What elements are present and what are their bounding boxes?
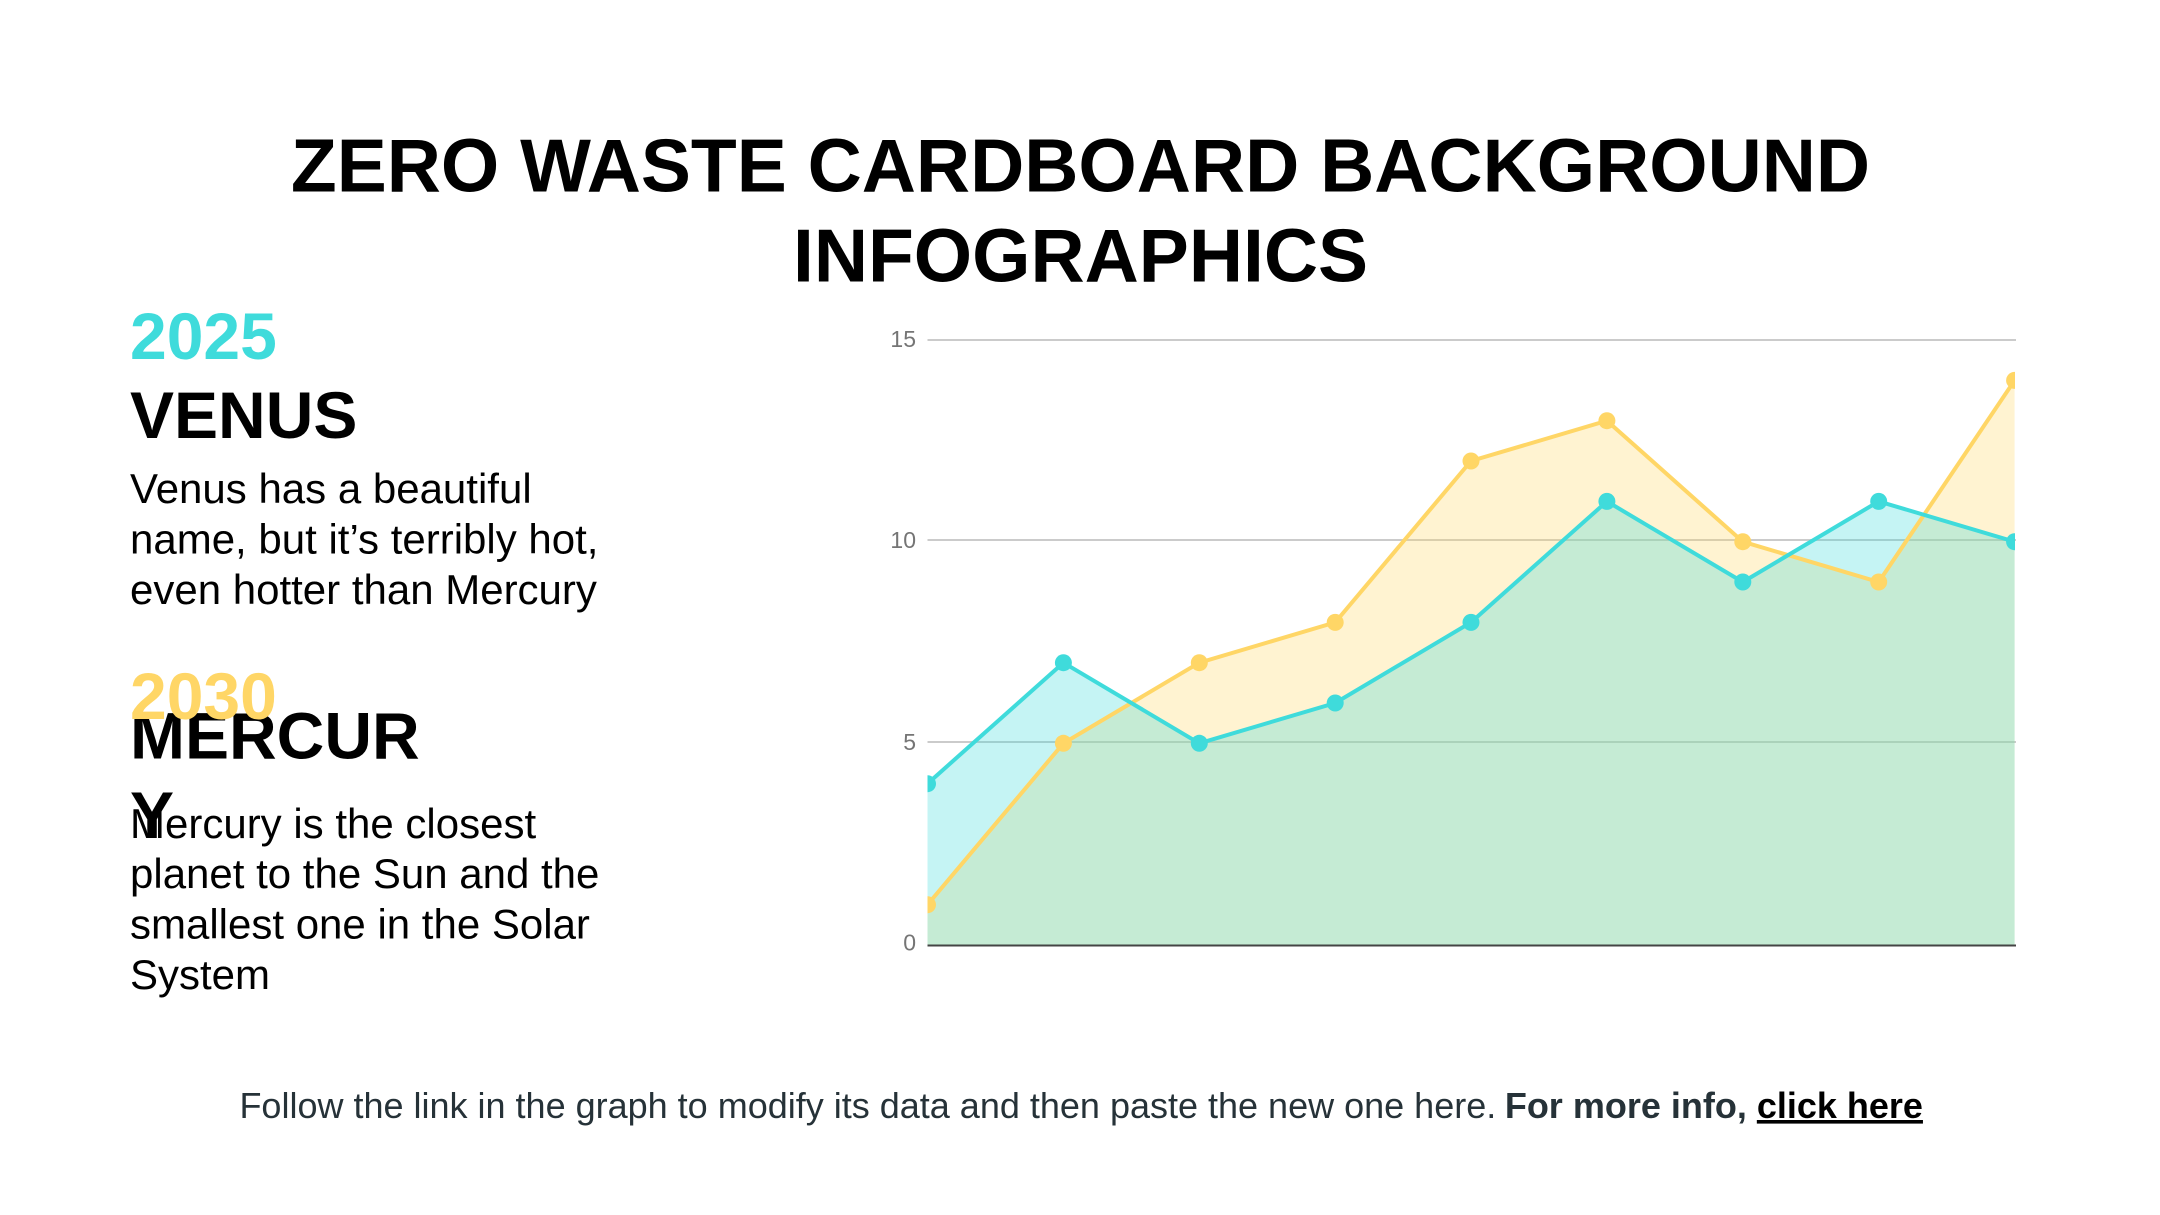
Mercury description: Mercury is the closest [130, 800, 536, 847]
teal series line and dots [919, 493, 2023, 792]
y axis labels: 0 [903, 930, 916, 956]
Venus description: Venus has a beautiful [130, 465, 532, 512]
Venus description: even hotter than Mercury [130, 566, 597, 613]
Mercury description: System [130, 951, 270, 998]
year 2025: 2025 [130, 299, 277, 373]
heading Venus: VENUS [130, 378, 357, 452]
y axis labels: 10 [890, 527, 916, 553]
Venus description [130, 465, 598, 613]
title [291, 124, 1870, 298]
heading Mercury: MERCUR [130, 698, 420, 772]
y axis labels [890, 326, 916, 956]
year 2030: 2030 [130, 659, 277, 733]
area line chart [890, 326, 2023, 956]
grid lines [928, 340, 2016, 742]
Mercury description: planet to the Sun and the [130, 850, 599, 897]
footer note: Follow the link in the graph to modify its data and then paste the new one here. For more info, click here [239, 1085, 1923, 1126]
title: ZERO WASTE CARDBOARD BACKGROUND [291, 124, 1870, 208]
Mercury description: smallest one in the Solar [130, 900, 590, 948]
teal series area [928, 501, 2015, 945]
yellow series area [928, 380, 2015, 945]
panel: 2030 Mercury [130, 659, 599, 998]
heading Mercury [130, 698, 420, 852]
x axis [928, 944, 2016, 946]
y axis labels: 15 [890, 326, 916, 352]
yellow series line and dots [919, 372, 2023, 913]
heading Mercury: Y [130, 778, 174, 852]
y axis labels: 5 [903, 729, 916, 755]
Mercury description [130, 800, 599, 998]
title: INFOGRAPHICS [793, 214, 1368, 298]
Venus description: name, but it’s terribly hot, [130, 516, 598, 562]
panel: 2025 Venus [130, 299, 598, 613]
